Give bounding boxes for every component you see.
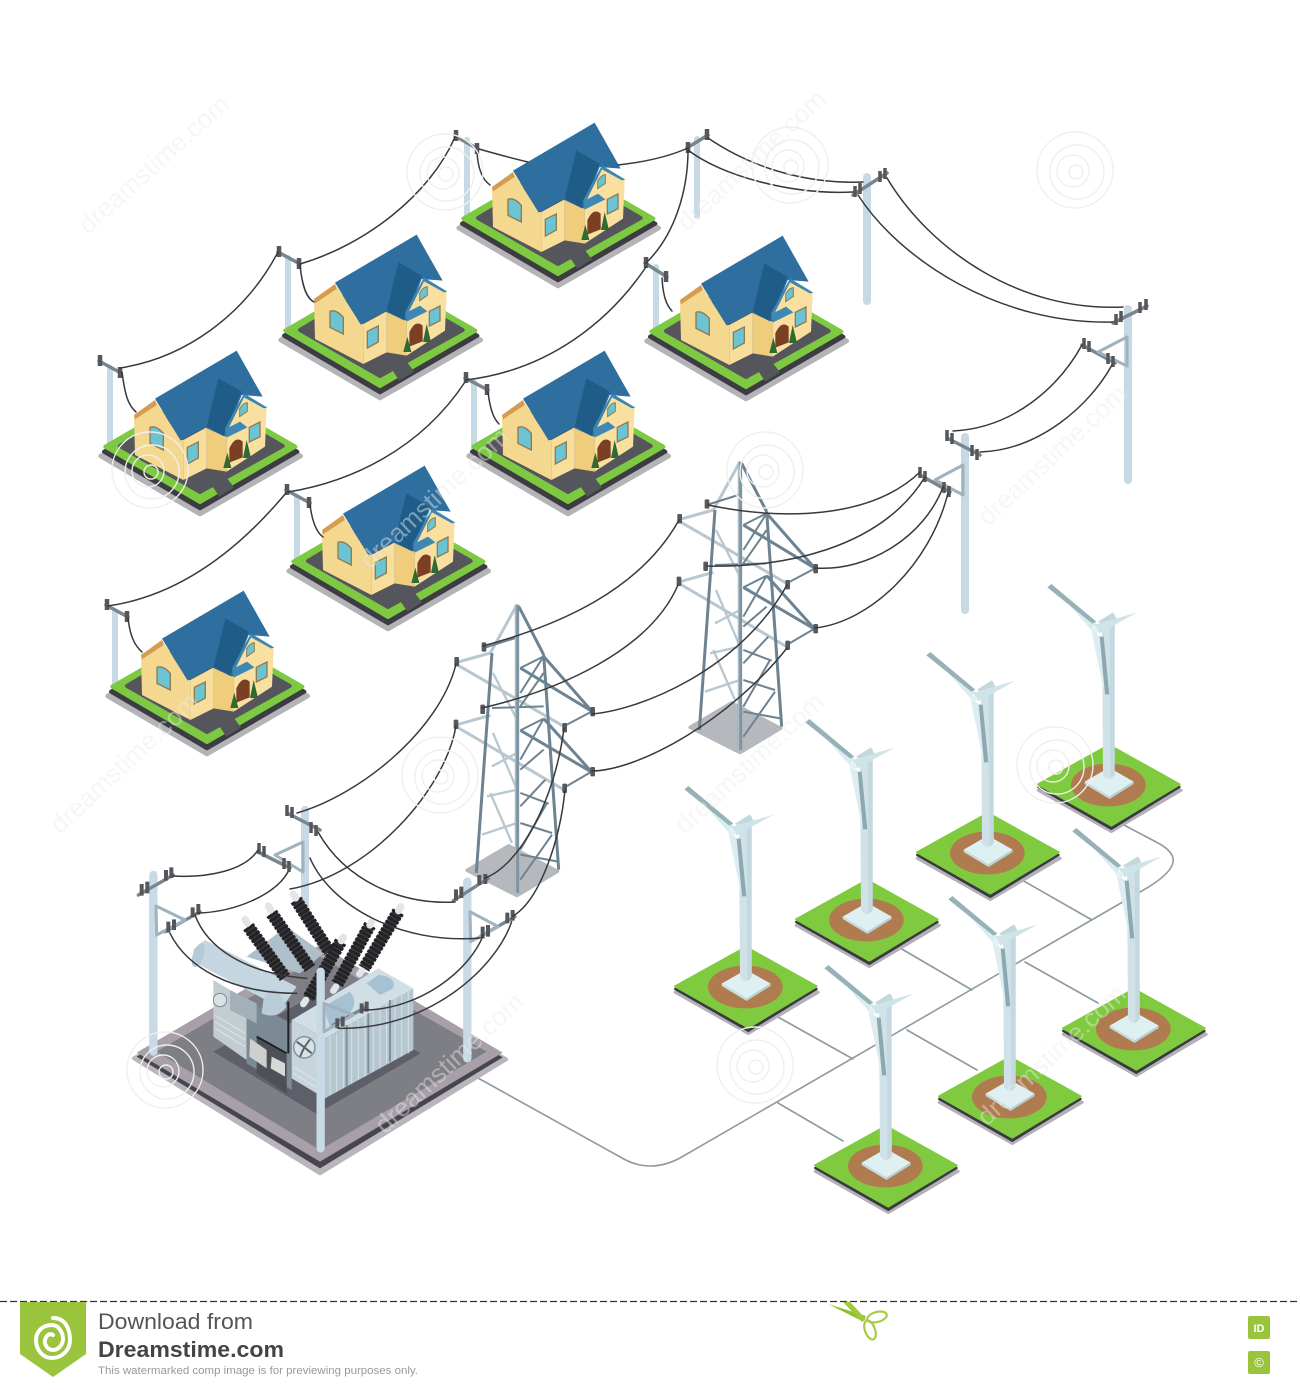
badge: copyright xyxy=(1248,1351,1270,1374)
wind turbine 2 xyxy=(796,719,939,967)
footer brand name: Dreamstime.com xyxy=(98,1337,284,1362)
footer note: This watermarked comp image is for previewing purposes only. xyxy=(98,1365,418,1377)
badge: ID: ID xyxy=(1254,1323,1265,1335)
stock watermarks: dreamstime.com xyxy=(44,686,205,839)
stock watermarks: dreamstime.com xyxy=(671,83,832,236)
wind turbine 1 xyxy=(675,786,818,1034)
stock watermarks: dreamstime.com xyxy=(972,378,1133,531)
stock watermarks: dreamstime.com xyxy=(971,978,1132,1131)
wind turbine 5 xyxy=(1063,828,1206,1076)
transmission tower left xyxy=(454,605,595,896)
wind turbine 6 xyxy=(939,896,1082,1144)
overhead power lines between towers and poles xyxy=(482,345,1112,771)
badge: copyright: © xyxy=(1254,1355,1264,1370)
wind turbine 4 xyxy=(1038,584,1181,832)
stock watermarks: dreamstime.com xyxy=(669,686,830,839)
substation with transformer xyxy=(134,810,515,1173)
footer heading: Download from xyxy=(98,1309,253,1334)
support poles xyxy=(138,867,515,1148)
high voltage bushings xyxy=(245,894,401,1004)
transformer body xyxy=(189,927,413,1098)
lines from left tower to substation poles xyxy=(173,664,565,939)
logo spiral xyxy=(36,1318,70,1358)
platform xyxy=(134,945,506,1173)
house 2 xyxy=(459,123,659,286)
stock watermarks: dreamstime.com xyxy=(72,89,235,239)
badge: ID xyxy=(1248,1316,1270,1339)
stock watermarks: dreamstime.com xyxy=(369,986,530,1139)
tall poles xyxy=(853,168,1147,610)
house 6 xyxy=(289,466,489,629)
conductors to transformer xyxy=(170,915,512,1028)
transmission tower right xyxy=(677,462,818,753)
stock watermarks xyxy=(44,83,1133,1139)
underground cables connecting wind turbines to substation xyxy=(478,824,1173,1166)
house 4 xyxy=(647,236,847,399)
house utility poles xyxy=(99,129,708,690)
stock watermarks: dreamstime.com xyxy=(354,421,515,574)
overhead power lines to houses xyxy=(108,137,1123,652)
house 3 xyxy=(281,235,481,398)
footer dashed cut line xyxy=(0,1300,1300,1302)
house 7 xyxy=(108,591,308,754)
back pole xyxy=(293,810,317,907)
wind turbine 7 xyxy=(815,965,958,1213)
footer logo ribbon xyxy=(20,1302,86,1377)
house 1 xyxy=(101,351,301,514)
back pole cross arms xyxy=(258,805,320,872)
wind turbine 3 xyxy=(917,652,1060,900)
icon: scissors xyxy=(828,1302,888,1341)
house 5 xyxy=(469,351,669,514)
